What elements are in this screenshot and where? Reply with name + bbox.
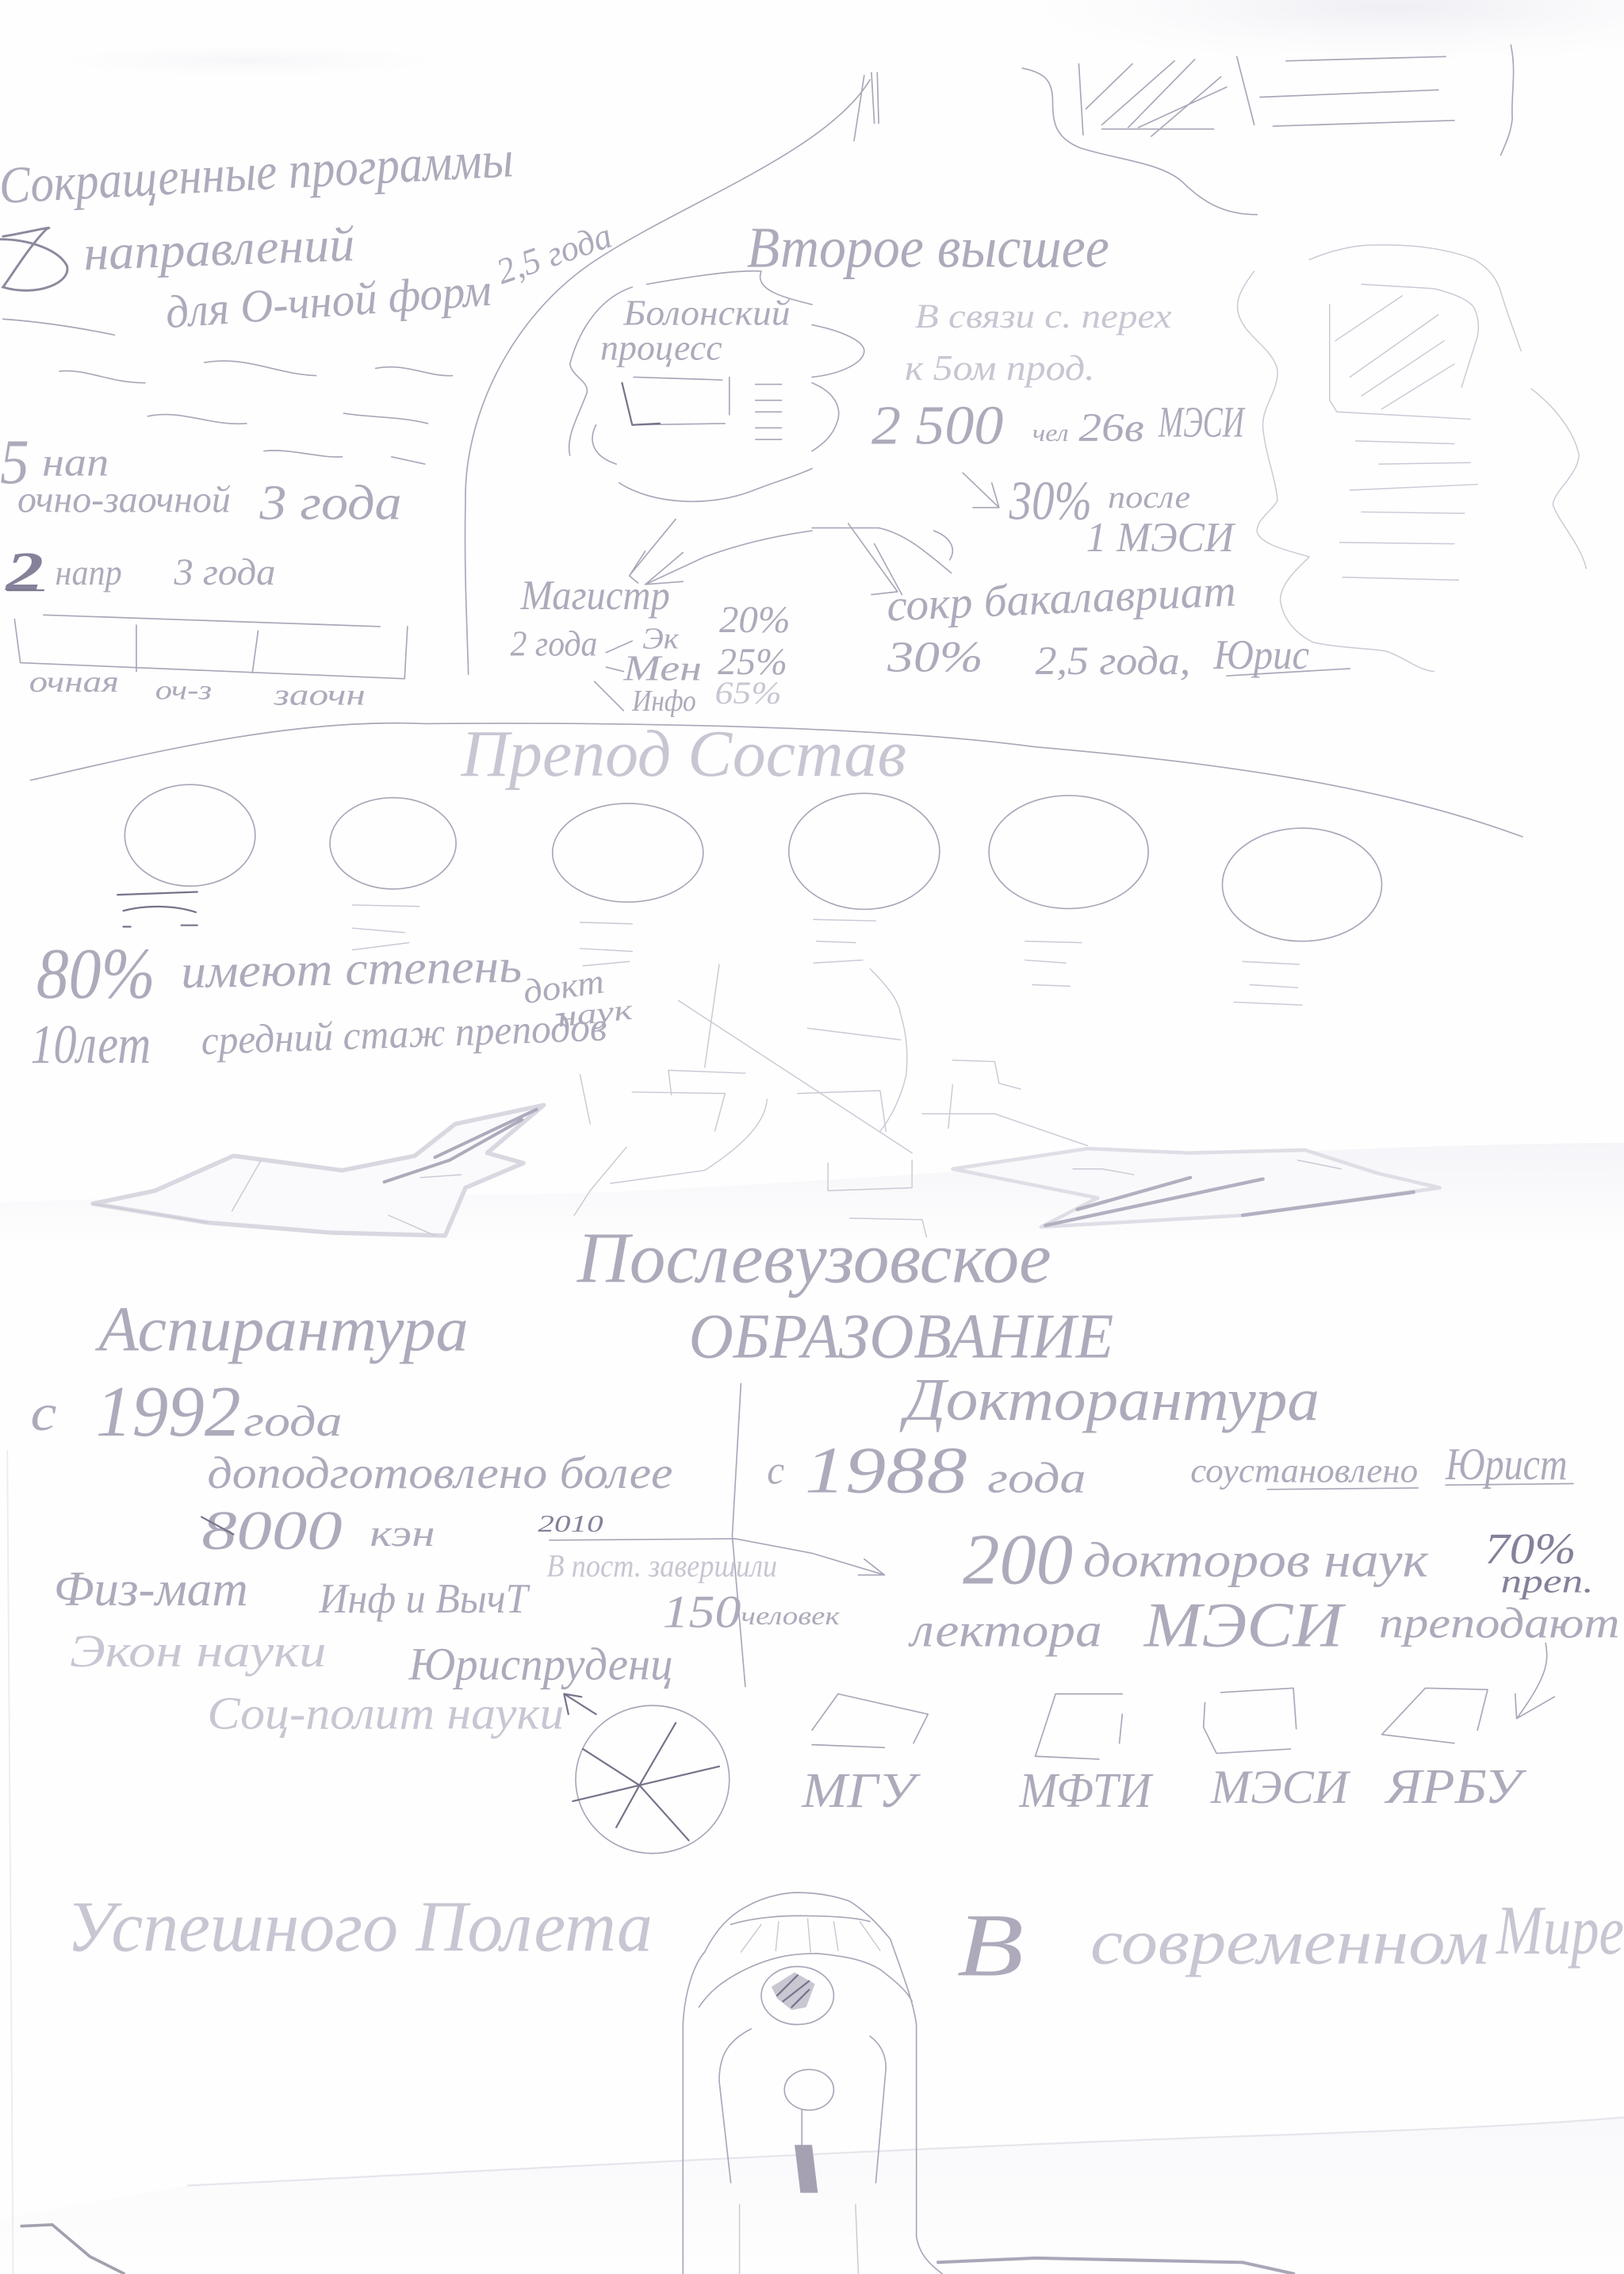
text: master: 2 года — [511, 623, 597, 663]
bar: study forms — [14, 615, 408, 712]
stat: 80 percent doctors: докт — [521, 962, 607, 1011]
panel: teaching staff — [30, 717, 1522, 1076]
column: postgraduate study: 150 — [663, 1586, 741, 1638]
column: doctoral study: докторов наук — [1083, 1534, 1429, 1588]
column: postgraduate study: 1992 — [96, 1371, 241, 1451]
column: doctoral study: лектора — [908, 1604, 1102, 1657]
stat: 5 part-time directions: 3 года — [259, 477, 402, 531]
stat: 30 percent after MESI — [963, 471, 1236, 561]
portrait 5 — [989, 796, 1148, 986]
column: doctoral study: Докторантура — [900, 1366, 1320, 1433]
column: doctoral study: преп. — [1501, 1564, 1594, 1601]
column: postgraduate study — [30, 1294, 840, 1739]
heading: postgraduate education: ОБРАЗОВАНИЕ — [689, 1301, 1113, 1371]
column: postgraduate study: 8000 — [201, 1501, 343, 1562]
stat: 80 percent doctors — [36, 934, 635, 1033]
closing text: in the modern world: В — [957, 1895, 1024, 1995]
logo: MSU — [801, 1694, 928, 1818]
logo: YarSU — [1382, 1688, 1527, 1814]
text: master — [511, 573, 791, 718]
column: doctoral study: Юрист — [1445, 1440, 1568, 1490]
arrow: to universities — [1515, 1643, 1554, 1719]
logo: YarSU: ЯРБУ — [1384, 1760, 1527, 1814]
column: postgraduate study: Юриспруденц — [408, 1638, 672, 1689]
arrow: to master programme — [630, 520, 812, 585]
text: master: 20% — [719, 600, 791, 641]
text: master: Магистр — [520, 573, 670, 619]
heading: second higher education: Второе высшее — [747, 215, 1109, 279]
stat: 2500 at MESI: МЭСИ — [1158, 397, 1246, 446]
illustration: left aeroplane — [93, 1105, 544, 1236]
stat: 2 directions: 3 года — [173, 552, 275, 593]
arrow: large curve upward — [465, 72, 879, 674]
stat: 5 part-time directions — [0, 427, 402, 531]
column: doctoral study: 1988 — [805, 1433, 967, 1507]
rocket window — [761, 1966, 833, 2025]
text: master: Мен — [622, 648, 702, 688]
paper fold details — [21, 2225, 1295, 2274]
panel: reduced programmes — [0, 130, 617, 712]
cloud: Bologna process: процесс — [600, 327, 722, 367]
portrait 2 — [330, 798, 456, 950]
cloud: Bologna process — [569, 271, 864, 501]
rocket key — [784, 2069, 833, 2193]
stat: 2 directions: напр — [56, 552, 122, 592]
column: postgraduate study: доподготовлено более — [208, 1448, 672, 1498]
logo: MESI — [1204, 1688, 1351, 1814]
column: postgraduate study: 2010 — [538, 1509, 603, 1537]
column: doctoral study: 200 — [963, 1520, 1073, 1600]
column: postgraduate study: Аспирантура — [94, 1294, 469, 1364]
column: postgraduate study: Экон науки — [70, 1625, 326, 1677]
stat: 80 percent doctors: имеют степень — [181, 940, 522, 999]
column: postgraduate study: Соц-полит науки — [208, 1688, 564, 1739]
panel: postgraduate education — [30, 1218, 1619, 1854]
column: postgraduate study: человек — [741, 1602, 840, 1631]
stat: 30 percent after MESI: после — [1108, 479, 1190, 515]
logo: MIPT — [1019, 1694, 1154, 1818]
stat: 30 percent after MESI: 1 МЭСИ — [1086, 515, 1236, 561]
stat: 8 directions: направлений — [82, 217, 355, 281]
panel: top right image block — [1022, 45, 1514, 215]
stat: 2500 at MESI — [871, 396, 1246, 457]
bar: study forms: оч-з — [155, 674, 212, 705]
portrait 6 — [1222, 828, 1382, 1005]
text: full-time form: для О-чной форм — [164, 264, 493, 338]
column: doctoral study: года — [987, 1453, 1086, 1501]
heading: teaching staff: Препод Состав — [461, 717, 906, 791]
stat: 30 percent after MESI: 30% — [1009, 471, 1092, 532]
chart: pie of science fields — [573, 1705, 730, 1854]
portrait 3 — [553, 803, 703, 966]
column: doctoral study: с — [767, 1448, 785, 1493]
bar: study forms: очная — [29, 665, 119, 699]
illustration: rocket — [683, 1892, 943, 2274]
text: short bachelor — [886, 566, 1350, 684]
column: postgraduate study: кэн — [370, 1513, 435, 1555]
closing text: in the modern world: современном — [1090, 1908, 1489, 1978]
stat: 80 percent doctors: наук — [556, 993, 635, 1033]
stat: 10 years average — [30, 1004, 607, 1076]
bar: study forms: заочн — [273, 679, 366, 712]
heading: postgraduate education: Послевузовское — [576, 1218, 1051, 1298]
column: doctoral study: соустановлено — [1190, 1452, 1418, 1490]
stat: 2500 at MESI: чел — [1032, 419, 1069, 447]
text: short bachelor: Юрис — [1213, 632, 1309, 678]
logo: MSU: МГУ — [801, 1764, 921, 1818]
text: transition note — [905, 297, 1172, 388]
logo: MIPT: МФТИ — [1019, 1764, 1154, 1818]
portrait 1 — [117, 784, 255, 926]
heading: postgraduate education — [576, 1218, 1113, 1371]
text: master: 65% — [714, 675, 782, 711]
text: transition note: В связи с. перех — [915, 297, 1172, 336]
panel: second higher education — [511, 215, 1350, 718]
stat: 8 directions — [0, 217, 355, 290]
text: 2.5 years: 2,5 года — [491, 215, 617, 292]
stat: 10 years average: 10лет — [30, 1014, 151, 1076]
text: master: 25% — [718, 642, 787, 683]
column: doctoral study: МЭСИ — [1143, 1589, 1346, 1660]
column: postgraduate study: Физ-мат — [54, 1563, 248, 1616]
stat: 2 directions — [5, 542, 275, 603]
stat: 80 percent doctors: 80% — [36, 934, 155, 1014]
stat: 5 part-time directions: очно-заочной — [17, 479, 231, 520]
closing text: successful flight: Успешного Полета — [67, 1886, 653, 1966]
logo: MESI: МЭСИ — [1210, 1761, 1351, 1814]
stat: 2 directions: 2 — [5, 542, 44, 603]
text: short bachelor: сокр бакалавриат — [886, 566, 1237, 631]
arrow: graduates to doctoral — [550, 1539, 884, 1575]
column: postgraduate study: В пост. завершили — [546, 1548, 777, 1584]
stat: 10 years average: средний стаж преподов — [201, 1004, 607, 1064]
text: short bachelor: 2,5 года, — [1036, 638, 1190, 684]
stat: 2500 at MESI: 26в — [1078, 405, 1144, 451]
column: postgraduate study: Инф и ВычТ — [318, 1576, 530, 1622]
text: transition note: к 5ом прод. — [905, 347, 1095, 388]
text: short bachelor: 30% — [887, 633, 983, 681]
illustration: right aeroplane — [952, 1149, 1440, 1227]
cloud: Bologna process: Болонский — [622, 293, 791, 333]
column: postgraduate study: года — [243, 1397, 343, 1445]
stat: 5 part-time directions: 5 — [0, 427, 29, 497]
portrait 4 — [789, 793, 940, 963]
column: doctoral study: 70% — [1484, 1524, 1576, 1573]
arrow: to short bachelor — [812, 523, 952, 595]
stat: 5 part-time directions: нап — [42, 440, 109, 485]
text: master: Эк — [642, 622, 680, 655]
arrow: pie to sciences — [564, 1694, 596, 1714]
closing text: in the modern world — [957, 1892, 1624, 1995]
stat: 2500 at MESI: 2 500 — [871, 396, 1003, 457]
column: doctoral study: преподают — [1379, 1598, 1619, 1647]
heading: reduced programmes: Сокращенные программы — [0, 130, 515, 215]
column: doctoral study — [767, 1366, 1619, 1660]
column: postgraduate study: с — [30, 1384, 56, 1442]
text: master: Инфо — [631, 685, 696, 718]
panel: right wavy image block — [1237, 245, 1586, 672]
illustration: faint rocket and buildings sketch — [574, 964, 1087, 1237]
